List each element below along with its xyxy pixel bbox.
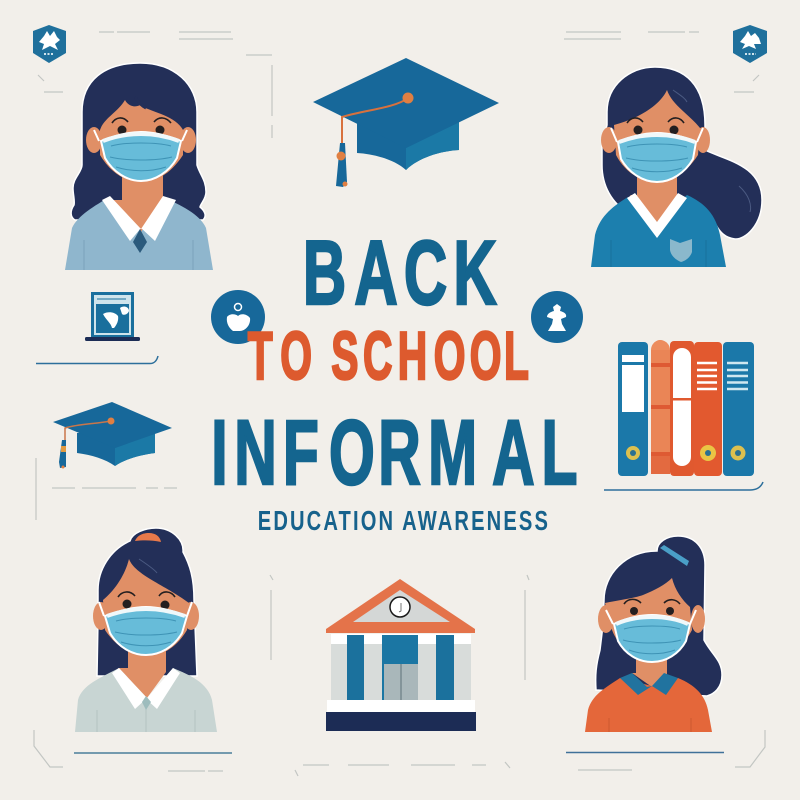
face bbox=[103, 559, 189, 656]
face mask bbox=[611, 128, 703, 182]
walls bbox=[331, 640, 471, 700]
face bbox=[614, 90, 700, 182]
steps bbox=[327, 700, 475, 712]
icon: small graduation cap bbox=[53, 402, 172, 468]
neck bbox=[118, 650, 166, 698]
rule beneath bottom right student bbox=[566, 752, 724, 754]
neck bbox=[112, 170, 163, 232]
illustration: student bottom left bbox=[75, 528, 217, 732]
hair bbox=[602, 67, 762, 239]
illustration: student top right bbox=[591, 67, 762, 267]
eyes bbox=[118, 126, 126, 134]
face mask bbox=[99, 602, 192, 655]
face bbox=[605, 578, 692, 662]
icon: large graduation cap bbox=[313, 58, 499, 187]
icon badge: apple circle bbox=[211, 290, 265, 344]
badge bbox=[670, 239, 692, 262]
emblem: right shield bbox=[733, 25, 767, 63]
door bbox=[384, 664, 418, 700]
roof bbox=[326, 579, 475, 633]
hair band bbox=[135, 533, 161, 542]
icon: school building bbox=[326, 579, 476, 731]
title: BACK: BACK bbox=[303, 223, 497, 324]
divider with curl: right bbox=[604, 482, 763, 490]
icon: row of books bbox=[618, 340, 754, 476]
book 3 bbox=[670, 341, 694, 476]
ears bbox=[598, 605, 614, 633]
collar bbox=[620, 673, 678, 695]
illustration: student bottom right bbox=[585, 536, 722, 732]
hair bbox=[71, 63, 206, 220]
hair bbox=[596, 536, 722, 696]
hair bbox=[97, 528, 197, 676]
collar bbox=[627, 193, 687, 238]
sweater bbox=[591, 195, 726, 267]
icon: window picture frame bbox=[85, 292, 140, 341]
hair ribbon bbox=[660, 545, 689, 566]
face bbox=[100, 100, 183, 182]
sweater bbox=[585, 678, 712, 732]
neck bbox=[630, 175, 677, 225]
collar bbox=[102, 196, 176, 241]
title: INFORMAL: INFORMAL bbox=[211, 402, 577, 504]
title: TO SCHOOL: TO SCHOOL bbox=[248, 317, 529, 394]
divider with curl: left bbox=[36, 356, 158, 364]
book 1 bbox=[618, 342, 648, 476]
emblem: left shield bbox=[33, 25, 66, 63]
icon badge: figure circle bbox=[531, 291, 583, 343]
book 2 bbox=[651, 340, 670, 474]
ears bbox=[601, 127, 617, 153]
collar bbox=[112, 668, 180, 709]
sweater bbox=[65, 197, 213, 270]
eyes bbox=[122, 600, 132, 608]
subtitle: EDUCATION AWARENESS: EDUCATION AWARENESS bbox=[258, 506, 548, 537]
eyes bbox=[634, 126, 642, 134]
ears bbox=[86, 127, 102, 153]
book 4 bbox=[694, 342, 722, 476]
illustration: student top left bbox=[65, 63, 213, 270]
face mask bbox=[606, 610, 696, 662]
tie bbox=[133, 229, 147, 253]
eyes bbox=[630, 607, 638, 615]
clock bbox=[390, 597, 410, 617]
ears bbox=[93, 602, 109, 630]
sweater bbox=[75, 668, 217, 732]
neck bbox=[632, 650, 667, 687]
columns bbox=[347, 635, 364, 700]
button bbox=[142, 696, 151, 710]
book 5 bbox=[723, 342, 754, 476]
decorated bottom rules bbox=[74, 752, 232, 754]
face mask bbox=[94, 130, 187, 181]
